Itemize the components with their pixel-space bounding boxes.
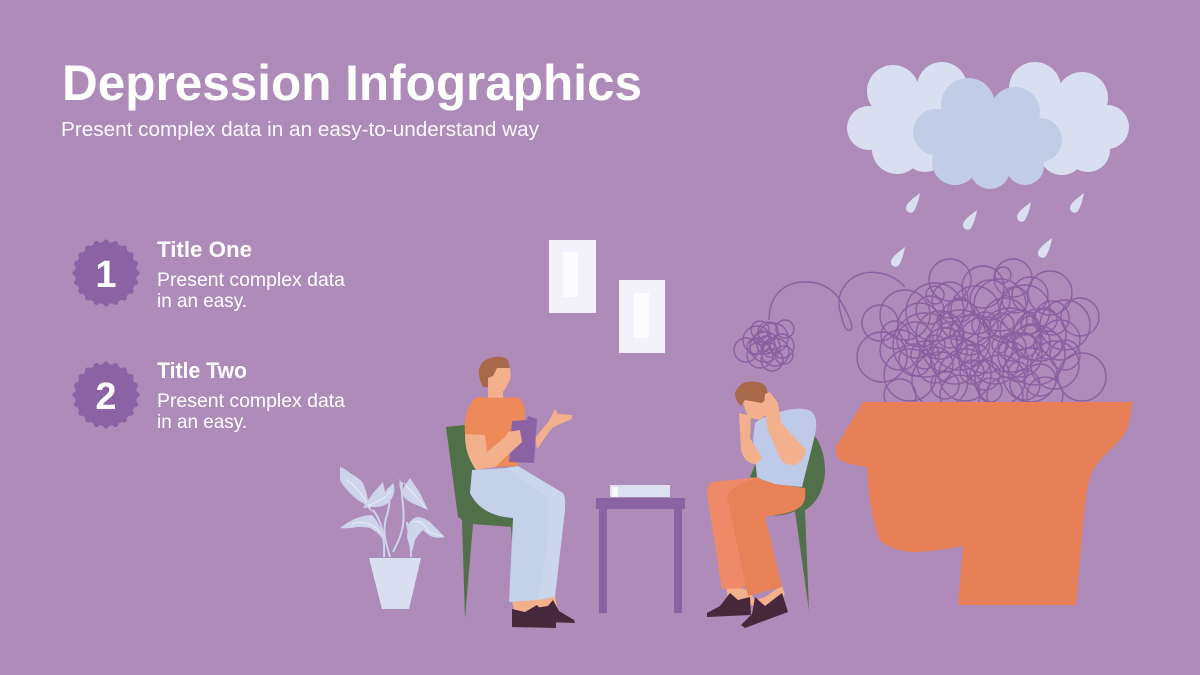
- item two: [75, 358, 345, 433]
- shirt: [753, 409, 816, 487]
- patient: [707, 382, 816, 628]
- table: [596, 498, 685, 613]
- tangled thought scribble: [734, 259, 1106, 415]
- far arm: [535, 409, 572, 449]
- near arm: [764, 392, 806, 465]
- description one: Present complex data: [157, 269, 345, 291]
- ankles: [512, 596, 557, 614]
- badge 2: 2: [95, 376, 117, 418]
- front cloud: [913, 78, 1062, 189]
- therapist: [465, 357, 575, 628]
- legs: [470, 466, 565, 602]
- shirt: [465, 397, 525, 467]
- icon: storm clouds: [847, 62, 1129, 189]
- badge 1: 1: [95, 254, 117, 296]
- heading: title two: Title Two: [157, 358, 247, 383]
- pot: [369, 558, 421, 609]
- item one: [75, 237, 345, 312]
- subtitle: Present complex data in an easy-to-understand way: [61, 119, 539, 141]
- left chair: [446, 425, 513, 618]
- shoes: [512, 600, 575, 628]
- plant: [340, 467, 445, 609]
- icon: rain drops: [891, 193, 1084, 267]
- description two: in an easy.: [157, 411, 247, 433]
- neck: [488, 380, 503, 402]
- leaves: [340, 467, 445, 552]
- table with book: [596, 485, 685, 613]
- badge 1: [75, 242, 137, 304]
- hair: [735, 382, 767, 406]
- heading: title one: Title One: [157, 237, 252, 262]
- right chair: [750, 430, 825, 611]
- hair: [479, 357, 510, 387]
- near arm: [465, 430, 522, 470]
- description two: Present complex data: [157, 390, 345, 412]
- description one: [157, 269, 345, 312]
- far arm: [739, 413, 762, 464]
- shoes: [707, 593, 788, 628]
- face: [487, 364, 510, 391]
- ankles: [726, 585, 785, 610]
- head silhouette: [836, 402, 1132, 605]
- clipboard: [509, 416, 537, 463]
- face: [742, 398, 769, 420]
- badge 2: [75, 364, 137, 426]
- stems: [373, 482, 411, 557]
- title: Depression Infographics: [62, 55, 642, 111]
- description one: in an easy.: [157, 290, 247, 312]
- description two: [157, 390, 345, 433]
- far leg: [707, 477, 760, 589]
- leaf veins: [347, 480, 442, 536]
- book: [610, 485, 670, 497]
- back right cloud: [1009, 62, 1129, 175]
- wall frames: [549, 240, 665, 353]
- near leg: [727, 478, 805, 596]
- back left cloud: [847, 62, 970, 174]
